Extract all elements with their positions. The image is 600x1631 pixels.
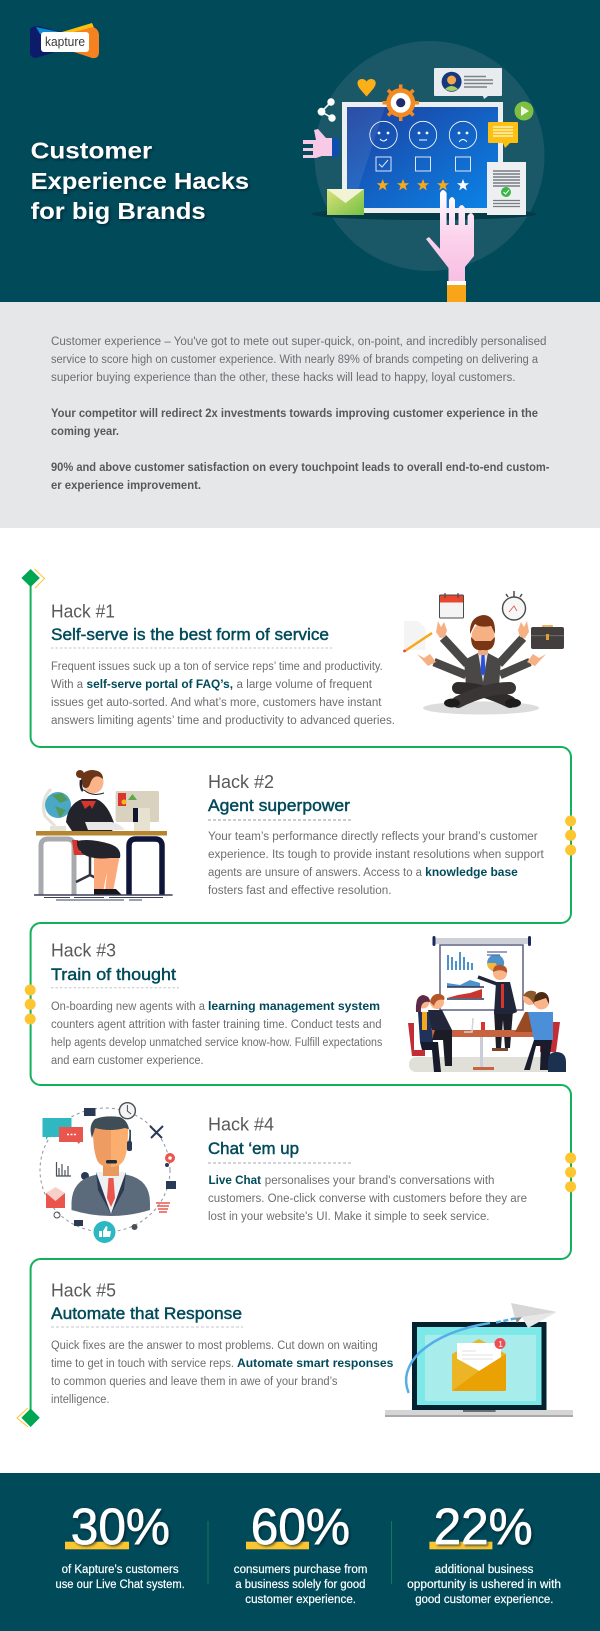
desk legs [41, 839, 74, 895]
icon: heart [358, 79, 376, 96]
hack 2 body: Your team’s performance directly reflects your brand’s customer [208, 831, 538, 843]
whiteboard [432, 936, 531, 1010]
teal envelope [166, 1181, 176, 1189]
calendar [440, 593, 464, 618]
computer monitor [116, 791, 159, 831]
footer stats panel [0, 1473, 600, 1631]
speech bubble with avatar [434, 68, 502, 99]
intro stat two: 90% and above customer satisfaction on every touchpoint leads to overall end-to-end custom- [51, 462, 550, 474]
hack 4 heading: Hack #4 [208, 1115, 274, 1135]
hack 2 heading: Hack #2 [208, 772, 274, 792]
floor lines [34, 894, 173, 896]
agent bust [72, 1116, 150, 1216]
hack 1 body [51, 661, 395, 727]
panel: hack 1 [51, 591, 564, 727]
paper plane [511, 1303, 557, 1328]
paper and pencil [403, 621, 432, 652]
left attendees [408, 994, 473, 1072]
hack 3 body: and earn customer experience. [51, 1055, 204, 1067]
connector dots hack 3 [25, 984, 36, 1024]
intro stat two: er experience improvement. [51, 480, 201, 492]
hack 5 body: Automate smart responses [237, 1358, 393, 1370]
illustration: laptop with email [385, 1303, 573, 1417]
stat: 60% [234, 1498, 367, 1606]
hack 2 body: fosters fast and effective resolution. [208, 885, 392, 897]
panel: hack 5 [51, 1281, 573, 1417]
briefcase [531, 626, 564, 649]
hack 3 body: counters agent attrition with faster training time. Conduct tests and [51, 1019, 382, 1031]
chat bubbles [42, 1118, 83, 1144]
tapping hand [426, 190, 474, 302]
hack 4 body: personalises your brand's conversations with [265, 1175, 494, 1187]
caption [56, 1564, 185, 1591]
caption [234, 1564, 367, 1606]
panel: hack 2 [34, 770, 545, 900]
hack 5 body: intelligence. [51, 1394, 110, 1406]
hack 5 heading: Hack #5 [51, 1281, 116, 1301]
intro panel [0, 302, 600, 528]
approved document [487, 162, 526, 215]
hack 3 body [51, 1001, 383, 1067]
bar chart icon [56, 1162, 71, 1176]
hack 5 body: Quick fixes are the answer to most problems. Cut down on waiting [51, 1340, 378, 1352]
tools [150, 1126, 163, 1138]
agent [66, 770, 125, 895]
connector dots hack 2 [565, 816, 576, 856]
icon: envelope [327, 189, 364, 215]
title [31, 138, 249, 224]
red envelope [46, 1187, 65, 1208]
hack 4 body: Live Chat [208, 1175, 261, 1187]
hack 5 body: to common queries and leave them in awe of your brand’s [51, 1376, 338, 1388]
stars [377, 179, 469, 190]
hack 3 body: On-boarding new agents with a [51, 1001, 206, 1013]
caption: good customer experience. [415, 1594, 553, 1606]
desk top [36, 831, 167, 836]
laptop [385, 1322, 573, 1417]
hack 3 body: learning management system [208, 1001, 380, 1013]
hack 1 body: answers limiting agents’ time and productivity to advanced queries. [51, 715, 395, 727]
hack 2 title: Agent superpower [208, 796, 350, 815]
hack 4 title: Chat ‘em up [208, 1139, 299, 1158]
illustration: multitasking businessman [403, 591, 564, 714]
hack 2 body [208, 831, 545, 897]
caption: opportunity is ushered in with [407, 1579, 561, 1591]
hack 1 body: issues get auto-sorted. And what’s more, customers have instant [51, 697, 382, 709]
thumbs up [94, 1221, 116, 1243]
green connector path [31, 578, 571, 1418]
header panel [0, 0, 600, 302]
caption: consumers purchase from [234, 1564, 367, 1576]
hack 5 title: Automate that Response [51, 1304, 242, 1323]
intro paragraph: superior buying experience than the other, these hacks will lead to happy, loyal customers. [51, 372, 516, 384]
notification badge: 1 [498, 1339, 503, 1349]
logo: kapture [30, 23, 99, 58]
hack 1 body: self-serve portal of FAQ’s, [86, 679, 233, 691]
hands [417, 621, 546, 666]
end marker diamond [17, 1408, 40, 1427]
hack 3 body: help agents develop unmatched service know-how. Fulfill expectations [51, 1037, 383, 1049]
intro paragraph: service to score high on customer experience. With nearly 89% of brands competing on delivering a [51, 354, 539, 366]
caption: a business solely for good [235, 1579, 365, 1591]
caption [407, 1564, 561, 1606]
caption: use our Live Chat system. [56, 1579, 185, 1591]
stat: 22% [407, 1498, 561, 1606]
crossed legs [458, 688, 510, 702]
hero illustration: feedback screen [303, 41, 544, 302]
small dark icons [74, 1220, 83, 1226]
intro stat one: Your competitor will redirect 2x investments towards improving customer experience in the [51, 408, 538, 420]
yellow chat bubble [488, 122, 518, 148]
torso [464, 652, 501, 686]
connector dots hack 4 [565, 1152, 576, 1192]
email envelope [452, 1339, 506, 1391]
title: Customer [31, 138, 152, 164]
divider [390, 1521, 392, 1584]
bag [548, 1052, 566, 1072]
stopwatch [502, 591, 526, 620]
hack 3 title: Train of thought [51, 965, 176, 984]
panel: hack 3 [51, 936, 566, 1072]
hack 2 body: agents are unsure of answers. Access to a [208, 867, 423, 879]
hack 1 title: Self-serve is the best form of service [51, 625, 329, 644]
hack 2 body: knowledge base [425, 867, 518, 879]
red list [156, 1203, 170, 1212]
arms [434, 638, 530, 675]
hack 5 body: time to get in touch with service reps. [51, 1358, 234, 1370]
start marker diamond [21, 569, 44, 588]
red gear [165, 1153, 175, 1167]
caption: of Kapture's customers [62, 1564, 179, 1576]
icon: share [318, 99, 335, 121]
right attendees [515, 991, 560, 1070]
panel: hack 4 [40, 1103, 527, 1243]
stat: 22%: 22% [434, 1498, 533, 1555]
intro paragraph: Customer experience – You've got to mete out super-quick, on-point, and incredibly personalised [51, 336, 546, 348]
flight path [406, 1318, 517, 1393]
illustration: call centre agent with icons [40, 1103, 176, 1243]
pointing hand left [303, 129, 339, 158]
hack 1 body: With a [51, 679, 84, 691]
presenter [478, 965, 517, 1051]
logo: kapture: kapture [45, 35, 85, 49]
hack 5 body [51, 1340, 393, 1406]
icon: play [514, 102, 534, 120]
title: for big Brands [31, 198, 206, 224]
globe [43, 789, 71, 831]
head [470, 615, 495, 655]
hack 4 body [208, 1175, 527, 1223]
hack 3 heading: Hack #3 [51, 941, 116, 961]
intro paragraph [51, 336, 546, 384]
hack 4 body: lost in your website's UI. Make it simple to seek service. [208, 1211, 490, 1223]
illustration: meeting room presentation [408, 936, 566, 1072]
clock [119, 1103, 135, 1119]
hack 1 body: Frequent issues suck up a ton of service reps’ time and productivity. [51, 661, 383, 673]
intro stat two [51, 462, 550, 492]
monitor [342, 102, 503, 213]
illustration: support agent at desk [34, 770, 173, 900]
stat: 60%: 60% [251, 1498, 350, 1555]
intro stat one [51, 408, 538, 438]
title: Experience Hacks [31, 168, 249, 194]
chair [72, 840, 98, 855]
caption: additional business [435, 1564, 534, 1576]
hack 2 body: experience. Its tough to provide instant resolutions when support [208, 849, 545, 861]
rating faces [370, 121, 477, 149]
small chat icon [84, 1108, 96, 1116]
notification badge [494, 1338, 506, 1349]
stat: 30% [56, 1498, 185, 1591]
stat: 30%: 30% [71, 1498, 170, 1555]
intro stat one: coming year. [51, 426, 119, 438]
checkboxes [376, 157, 470, 171]
hack 1 body: a large volume of frequent [236, 679, 373, 691]
icon: gear [382, 84, 419, 121]
hack 1 heading: Hack #1 [51, 602, 115, 622]
hack 4 body: customers. One-click converse with customers before they are [208, 1193, 527, 1205]
divider [207, 1521, 209, 1584]
caption: customer experience. [245, 1594, 356, 1606]
table [425, 1022, 540, 1070]
